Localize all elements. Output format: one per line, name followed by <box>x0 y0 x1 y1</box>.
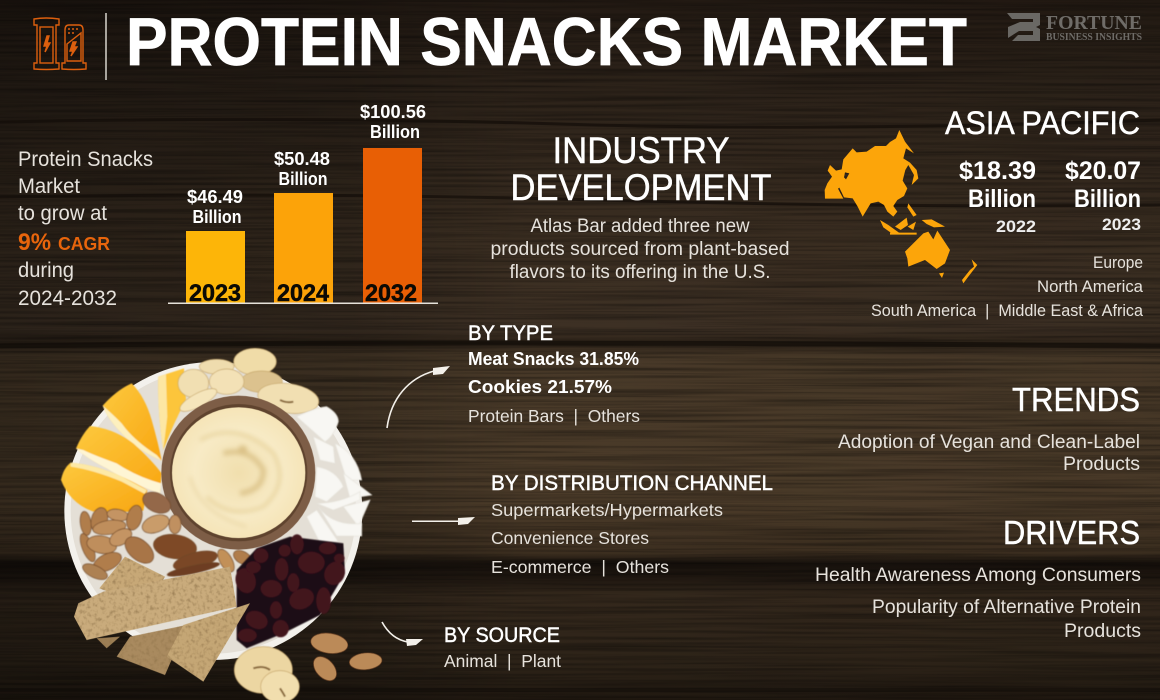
CAGR text block: Protein Snacks <box>18 148 153 171</box>
logo: Fortune Business Insights <box>1007 12 1142 43</box>
industry development: products sourced from plant-based <box>490 239 790 260</box>
CAGR text block: CAGR <box>58 234 110 254</box>
bar 2023: Billion <box>192 206 242 227</box>
trends <box>838 381 1140 475</box>
industry development <box>490 130 790 283</box>
CAGR text block: 9% <box>18 229 51 256</box>
plate <box>64 362 362 660</box>
by distribution channel: BY DISTRIBUTION CHANNEL <box>491 472 773 495</box>
bar 2023: 2023 <box>189 280 241 307</box>
bar 2023: $46.49 <box>187 186 243 207</box>
CAGR text block: Market <box>18 175 80 198</box>
bar 2032: $100.56 <box>360 101 426 122</box>
industry development: flavors to its offering in the U.S. <box>510 262 770 283</box>
CAGR text block: 2024-2032 <box>18 287 117 310</box>
by type: BY TYPE <box>468 322 553 345</box>
dried cranberries <box>233 534 349 648</box>
granola bars <box>74 557 250 682</box>
almonds and pecans <box>77 488 254 583</box>
banana chips <box>177 348 321 700</box>
Asia Pacific heading and values: $20.07 <box>1065 157 1141 185</box>
bar 2024 <box>274 148 333 307</box>
title: PROTEIN SNACKS MARKET <box>126 4 967 80</box>
orange wedges <box>61 368 186 512</box>
loose almonds <box>309 631 383 685</box>
Asia Pacific heading and values: Billion <box>968 185 1036 213</box>
by distribution channel <box>491 472 773 577</box>
industry development: INDUSTRY <box>552 130 730 171</box>
drivers: Health Awareness Among Consumers <box>815 565 1141 586</box>
drivers: DRIVERS <box>1003 514 1140 551</box>
Asia Pacific heading and values: ASIA PACIFIC <box>945 105 1140 141</box>
other regions <box>871 254 1144 320</box>
plate of protein snacks <box>61 348 383 700</box>
bar 2024: $50.48 <box>274 148 330 169</box>
industry development: DEVELOPMENT <box>510 167 772 208</box>
industry development: Atlas Bar added three new <box>530 216 750 237</box>
trends: Products <box>1063 454 1140 475</box>
Asia Pacific heading and values: 2023 <box>1102 215 1141 234</box>
drivers <box>815 514 1141 642</box>
header divider <box>105 13 107 80</box>
Asia Pacific heading and values <box>945 105 1141 236</box>
drivers: Popularity of Alternative Protein <box>872 597 1141 618</box>
by distribution channel: Convenience Stores <box>491 528 649 548</box>
wooden bowl <box>161 396 315 550</box>
by type: Cookies 21.57% <box>468 377 612 397</box>
by type: Protein Bars | Others <box>468 406 640 426</box>
by type: Meat Snacks 31.85% <box>468 349 639 369</box>
arrow: by type <box>387 366 450 428</box>
bar 2024: Billion <box>278 168 328 189</box>
drivers: Products <box>1064 621 1141 642</box>
bar 2032: 2032 <box>365 280 417 307</box>
trends: TRENDS <box>1012 381 1140 418</box>
CAGR text block: to grow at <box>18 202 107 225</box>
Asia Pacific heading and values: Billion <box>1074 185 1141 213</box>
bar 2023 <box>186 186 245 307</box>
hummus <box>172 407 305 538</box>
by distribution channel: E-commerce | Others <box>491 557 669 577</box>
by source <box>444 624 561 671</box>
logo: Fortune Business Insights: FORTUNE <box>1046 12 1142 34</box>
other regions: South America | Middle East & Africa <box>871 302 1144 320</box>
arrow: by source <box>382 622 423 646</box>
by source: Animal | Plant <box>444 651 561 671</box>
Asia Pacific heading and values: $18.39 <box>959 157 1036 185</box>
arrow: by distribution channel <box>412 517 475 525</box>
bar 2032 <box>360 101 426 307</box>
by distribution channel: Supermarkets/Hypermarkets <box>491 500 723 520</box>
icon: Asia Pacific map <box>825 130 977 283</box>
Asia Pacific heading and values: 2022 <box>996 217 1036 236</box>
CAGR text block: during <box>18 259 74 282</box>
other regions: North America <box>1037 278 1144 296</box>
icon: protein bars <box>34 18 86 70</box>
by source: BY SOURCE <box>444 624 560 647</box>
bar 2032: Billion <box>370 121 420 142</box>
by type <box>468 322 640 426</box>
CAGR text block <box>18 148 153 310</box>
trends: Adoption of Vegan and Clean-Label <box>838 432 1140 453</box>
bar chart <box>168 101 438 307</box>
bar 2024: 2024 <box>277 280 330 307</box>
coconut flakes <box>297 407 372 543</box>
logo: Fortune Business Insights: BUSINESS INSIGHTS <box>1046 32 1142 43</box>
other regions: Europe <box>1093 254 1143 272</box>
